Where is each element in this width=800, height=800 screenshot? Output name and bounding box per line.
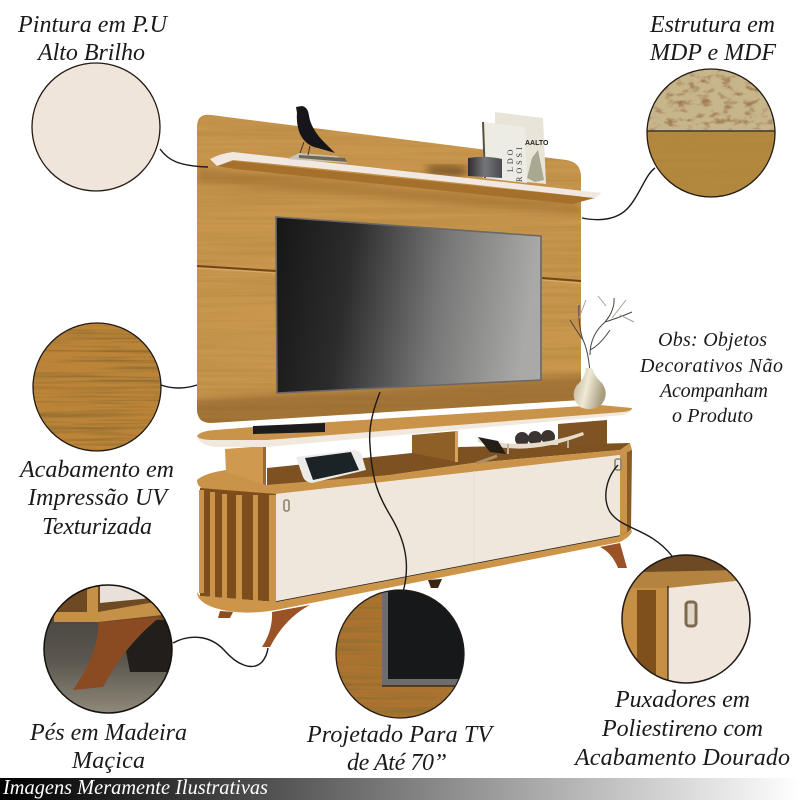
label: UV finish: Texturizada xyxy=(42,514,152,540)
circle: textured UV finish xyxy=(33,323,161,451)
connector lines xyxy=(160,149,672,666)
note: decorative objects xyxy=(639,329,783,427)
cabinet top xyxy=(197,443,632,494)
books: LDO xyxy=(506,147,515,172)
cabinet interior xyxy=(267,443,630,487)
slats light xyxy=(199,490,276,607)
note: decorative objects: o Produto xyxy=(672,405,753,427)
bowl with spheres xyxy=(477,430,584,463)
center divider xyxy=(412,431,458,462)
circle: golden handle close-up xyxy=(622,555,750,683)
cabinet base rail xyxy=(197,530,632,613)
shelf xyxy=(217,161,595,204)
connector: TV xyxy=(370,392,406,592)
label: structure: MDP e MDF xyxy=(649,40,776,66)
note: decorative objects: Obs: Objetos xyxy=(658,329,767,351)
circle: high gloss paint xyxy=(32,63,160,191)
label: high gloss paint: Pintura em P.U xyxy=(17,12,169,38)
books: ROSSI xyxy=(515,144,524,182)
label: structure xyxy=(649,12,776,66)
label: TV size: Projetado Para TV xyxy=(306,722,494,748)
connector: structure xyxy=(582,168,655,220)
label: handles: Acabamento Dourado xyxy=(573,745,790,771)
feet xyxy=(218,543,627,647)
label: feet: Maçica xyxy=(71,748,145,774)
footer text: Imagens Meramente Ilustrativas xyxy=(2,775,268,799)
label: feet: Pés em Madeira xyxy=(29,720,187,746)
label: handles: Poliestireno com xyxy=(601,716,763,742)
label: high gloss paint xyxy=(17,12,169,66)
label: handles xyxy=(573,687,790,771)
label: high gloss paint: Alto Brilho xyxy=(36,40,145,66)
right divider xyxy=(558,420,607,447)
vase xyxy=(574,368,606,409)
wood panel xyxy=(197,114,581,423)
label: UV finish xyxy=(18,457,174,540)
TV wall panel with shelf and TV xyxy=(190,110,602,440)
doors xyxy=(276,455,620,602)
slats dark back xyxy=(200,488,276,602)
remote on stand xyxy=(253,423,325,434)
connector: paint xyxy=(160,149,208,167)
bird figurine xyxy=(287,106,347,163)
handles xyxy=(284,459,621,511)
label: handles: Puxadores em xyxy=(614,687,750,713)
flat-screen TV xyxy=(276,217,541,393)
decor on shelf: bird, books, cup xyxy=(287,106,549,184)
circle: solid wood feet xyxy=(44,585,175,713)
books: AALTO xyxy=(525,140,549,147)
stand top, cabinet and feet xyxy=(197,405,632,647)
footer bar xyxy=(0,775,800,800)
cup xyxy=(468,157,502,178)
connector: handle xyxy=(606,465,672,556)
label: TV size xyxy=(306,722,494,776)
label: TV size: de Até 70” xyxy=(347,750,447,776)
left wood block xyxy=(225,446,266,485)
label: UV finish: Impressão UV xyxy=(27,485,169,511)
connector: feet xyxy=(173,637,268,666)
books xyxy=(483,112,549,184)
label: feet xyxy=(29,720,187,774)
decor: vase with branches xyxy=(570,296,634,409)
stand top xyxy=(197,405,632,447)
right end post xyxy=(620,450,632,537)
label: UV finish: Acabamento em xyxy=(18,457,174,483)
game console xyxy=(296,450,366,483)
circle: MDP and MDF structure xyxy=(647,69,775,197)
label: structure: Estrutura em xyxy=(649,12,775,38)
circle: TV mount close-up xyxy=(336,590,472,718)
branches xyxy=(570,296,634,372)
note: decorative objects: Decorativos Não xyxy=(639,355,783,377)
note: decorative objects: Acompanham xyxy=(658,380,768,402)
connector: UV finish xyxy=(161,385,197,388)
